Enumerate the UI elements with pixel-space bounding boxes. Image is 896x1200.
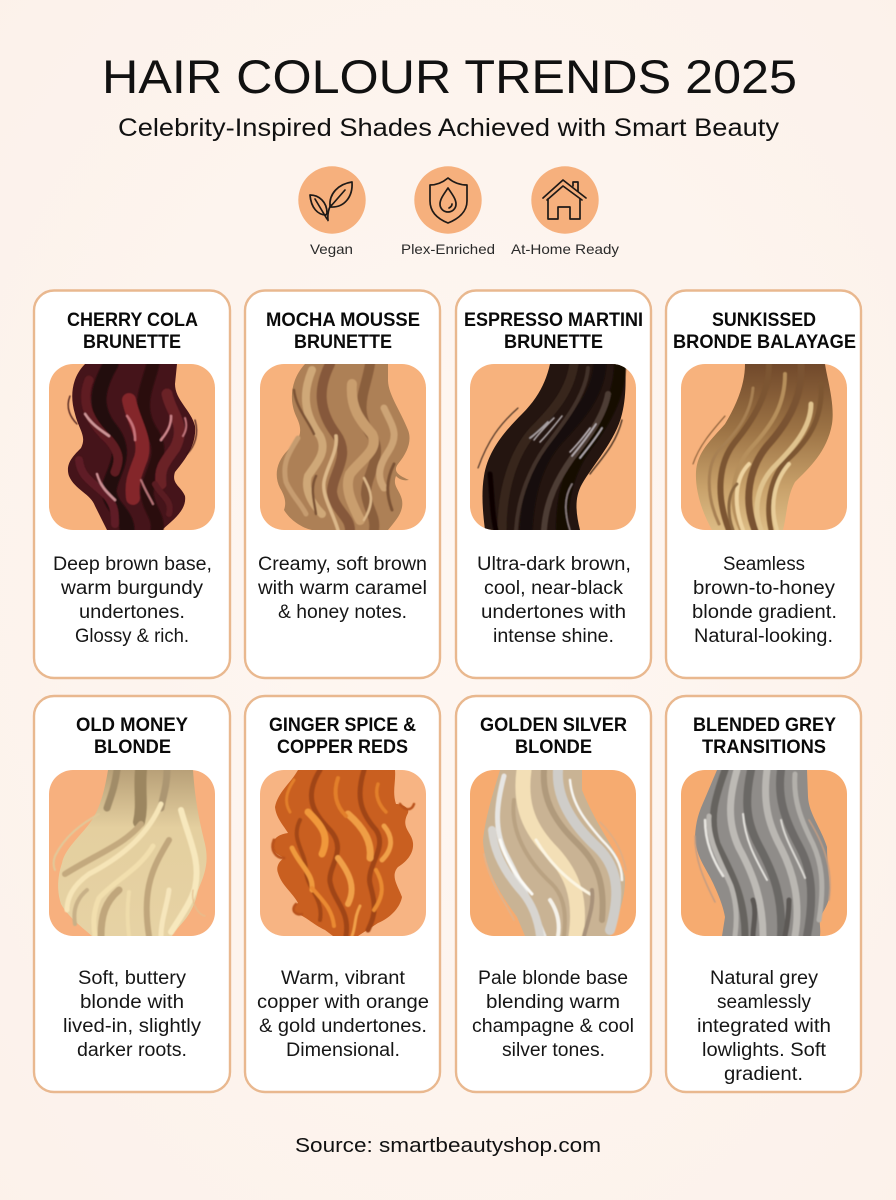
heading: mocha mousse brunette: MOCHA MOUSSE <box>266 309 420 331</box>
description: darker roots. <box>77 1040 187 1061</box>
description: blonde with <box>80 992 184 1013</box>
description <box>257 554 427 623</box>
description: warm burgundy <box>60 578 204 599</box>
hair swatch: sunkissed bronde <box>681 364 847 530</box>
heading: golden silver blonde: GOLDEN SILVER <box>480 714 627 736</box>
badge: vegan <box>298 166 366 257</box>
icon: shield with drop <box>430 178 467 223</box>
hair swatch: blended grey <box>681 770 847 936</box>
source line: Source: smartbeautyshop.com <box>295 1135 601 1157</box>
heading: cherry cola brunette: BRUNETTE <box>83 331 181 353</box>
icon: house <box>543 180 586 219</box>
description: copper with orange <box>257 992 429 1013</box>
description: blonde gradient. <box>692 602 837 623</box>
heading: blended grey transitions <box>693 714 836 758</box>
description: Soft, buttery <box>78 968 187 989</box>
heading: ginger spice and copper reds: COPPER REDS <box>277 736 408 758</box>
description: Warm, vibrant <box>281 968 406 989</box>
description <box>53 554 212 647</box>
heading: ginger spice and copper reds: GINGER SPICE & <box>269 714 416 736</box>
heading: blended grey transitions: TRANSITIONS <box>702 736 826 758</box>
heading: cherry cola brunette: CHERRY COLA <box>67 309 198 331</box>
heading: espresso martini brunette: ESPRESSO MARTINI <box>464 309 643 331</box>
description: integrated with <box>697 1016 831 1037</box>
description: seamlessly <box>717 992 811 1013</box>
description: Creamy, soft brown <box>258 554 427 575</box>
card: ginger spice and copper reds <box>245 696 440 1092</box>
card: sunkissed bronde balayage <box>666 290 861 678</box>
description: silver tones. <box>502 1040 605 1061</box>
description <box>697 968 831 1085</box>
label: plex-enriched: Plex-Enriched <box>401 241 495 257</box>
hair swatch: mocha mousse <box>260 364 426 530</box>
description: Glossy & rich. <box>75 626 189 647</box>
description: undertones with <box>481 602 626 623</box>
heading: sunkissed bronde balayage: SUNKISSED <box>712 309 816 331</box>
description: Seamless <box>723 554 805 575</box>
description: Pale blonde base <box>478 968 628 989</box>
icon: leaves <box>310 182 352 220</box>
heading: sunkissed bronde balayage <box>673 309 856 353</box>
heading: blended grey transitions: BLENDED GREY <box>693 714 836 736</box>
hair swatch: old money blonde <box>49 770 215 936</box>
description: lived-in, slightly <box>63 1016 202 1037</box>
description: Natural grey <box>710 968 819 989</box>
description: Dimensional. <box>286 1040 400 1061</box>
label: vegan: Vegan <box>310 241 353 257</box>
card: old money blonde <box>34 696 230 1092</box>
description: gradient. <box>724 1064 803 1085</box>
hair swatch: cherry cola <box>49 364 215 530</box>
heading: espresso martini brunette: BRUNETTE <box>504 331 603 353</box>
heading: mocha mousse brunette <box>266 309 420 353</box>
description: blending warm <box>486 992 620 1013</box>
card: blended grey transitions <box>666 696 861 1092</box>
heading: ginger spice and copper reds <box>269 714 416 758</box>
heading: golden silver blonde <box>480 714 627 758</box>
badge: at-home ready <box>511 166 619 257</box>
heading: old money blonde: BLONDE <box>94 736 171 758</box>
description: champagne & cool <box>472 1016 634 1037</box>
description: lowlights. Soft <box>702 1040 827 1061</box>
description: intense shine. <box>493 626 614 647</box>
heading: mocha mousse brunette: BRUNETTE <box>294 331 392 353</box>
description: Deep brown base, <box>53 554 212 575</box>
heading: old money blonde <box>76 714 188 758</box>
heading: espresso martini brunette <box>464 309 643 353</box>
hair swatch: golden silver <box>470 770 636 936</box>
description: Ultra-dark brown, <box>477 554 631 575</box>
description: cool, near-black <box>484 578 624 599</box>
description: brown-to-honey <box>693 578 836 599</box>
card: mocha mousse brunette <box>245 290 440 678</box>
description: with warm caramel <box>257 578 427 599</box>
badge: plex-enriched <box>401 166 495 257</box>
description <box>63 968 202 1061</box>
heading: cherry cola brunette <box>67 309 198 353</box>
subtitle: Celebrity-Inspired Shades Achieved with Smart Beauty <box>118 114 780 142</box>
description <box>257 968 429 1061</box>
title: HAIR COLOUR TRENDS 2025 <box>102 50 797 103</box>
label: at-home ready: At-Home Ready <box>511 241 619 257</box>
card: espresso martini brunette <box>456 290 651 678</box>
description <box>477 554 631 647</box>
description: Natural-looking. <box>694 626 833 647</box>
heading: sunkissed bronde balayage: BRONDE BALAYAGE <box>673 331 856 353</box>
card: golden silver blonde <box>456 696 651 1092</box>
description: & gold undertones. <box>259 1016 427 1037</box>
description <box>472 968 634 1061</box>
description: undertones. <box>79 602 185 623</box>
heading: old money blonde: OLD MONEY <box>76 714 188 736</box>
card: cherry cola brunette <box>34 290 230 678</box>
heading: golden silver blonde: BLONDE <box>515 736 592 758</box>
hair swatch: ginger and copper <box>260 770 426 936</box>
hair swatch: espresso martini <box>470 364 636 530</box>
description: & honey notes. <box>278 602 407 623</box>
description <box>692 554 837 647</box>
